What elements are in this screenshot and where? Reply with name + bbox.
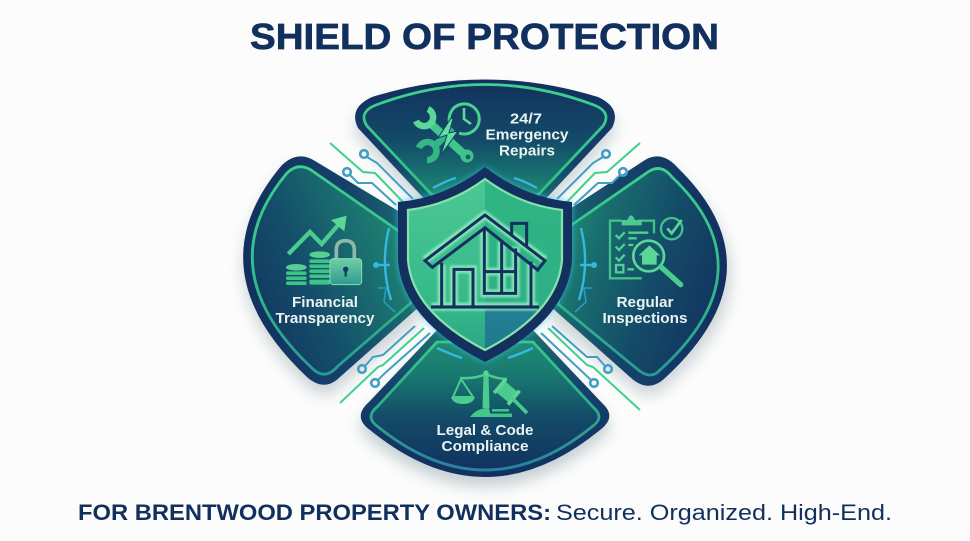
panel: legal and code compliance <box>361 330 609 487</box>
icon: wrenches, clock and bolt <box>416 104 479 162</box>
label: 24/7 Emergency Repairs: 24/7 <box>510 112 542 128</box>
label: 24/7 Emergency Repairs <box>486 112 568 160</box>
footer tagline light: Secure. Organized. High-End. <box>556 500 892 525</box>
label: 24/7 Emergency Repairs: Emergency <box>486 128 568 144</box>
label: Financial Transparency: Transparency <box>276 311 374 327</box>
central shield <box>398 167 572 362</box>
label: Regular Inspections <box>602 295 688 327</box>
circuit lines <box>330 143 640 410</box>
label: Legal & Code Compliance <box>436 423 534 455</box>
icon: house <box>425 215 545 307</box>
label: 24/7 Emergency Repairs: Repairs <box>499 144 555 160</box>
icon: clipboard and magnifier <box>610 215 682 285</box>
glow arcs around shield <box>373 178 597 358</box>
panel: regular inspections <box>550 156 731 396</box>
label: Legal & Code Compliance: Legal & Code <box>436 423 534 439</box>
label: Regular Inspections: Inspections <box>602 311 688 327</box>
title: SHIELD OF PROTECTION <box>250 16 719 57</box>
label: Financial Transparency <box>276 295 374 327</box>
label: Regular Inspections: Regular <box>616 295 674 311</box>
panel: 24/7 emergency repairs <box>355 80 615 215</box>
label: Financial Transparency: Financial <box>292 295 358 311</box>
footer tagline: FOR BRENTWOOD PROPERTY OWNERS: <box>78 500 551 525</box>
label: Legal & Code Compliance: Compliance <box>442 439 528 455</box>
panel: financial transparency <box>243 156 420 395</box>
icon: growth arrow, coins and lock <box>286 216 362 285</box>
icon: scales and gavel <box>451 370 527 417</box>
